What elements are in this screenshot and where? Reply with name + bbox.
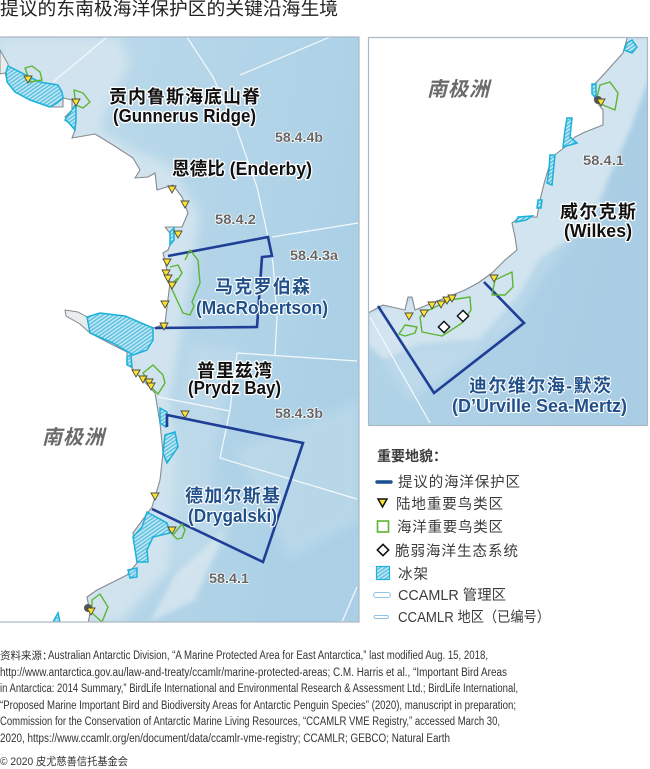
label: Gunnerus Ridge: 贡内鲁斯海底山脊 <box>109 86 260 107</box>
ice shelves <box>0 50 178 622</box>
marine important bird areas <box>399 82 618 336</box>
copyright: © 2020 皮尤慈善信托基金会 <box>0 754 128 768</box>
panel: right map <box>366 35 650 425</box>
CCAMLR region numbers <box>209 129 338 586</box>
label: Wilkes <box>560 201 636 241</box>
CCAMLR region numbers: 58.4.3a <box>290 247 338 263</box>
right map frame <box>368 38 648 426</box>
CCAMLR region numbers: 58.4.4b <box>275 129 323 145</box>
CCAMLR management and region boundaries <box>53 37 358 622</box>
legend item: ice shelf <box>376 566 428 583</box>
legend item: marine IBA: 海洋重要鸟类区 <box>397 519 503 536</box>
Antarctica landmass <box>0 73 188 624</box>
label: Gunnerus Ridge <box>109 86 260 126</box>
label: D'Urville Sea-Mertz: (D’Urville Sea-Mertz) <box>452 396 627 416</box>
CCAMLR boundary <box>370 317 430 423</box>
sources: http://www.antarctica.gov.au/law-and-treaty/ccamlr/marine-protected-areas; C.M. Harris et al., “Important Bird Areas <box>0 667 507 679</box>
sources <box>0 649 518 745</box>
label: Antarctica: 南极洲 <box>427 79 492 101</box>
panel: left map <box>0 37 359 624</box>
label: MacRobertson: (MacRobertson) <box>196 298 328 318</box>
label: Prydz Bay: 普里兹湾 <box>197 360 272 381</box>
legend title: 重要地貌： <box>377 448 447 464</box>
label: MacRobertson <box>196 277 328 318</box>
legend item: proposed MPA: 提议的海洋保护区 <box>398 474 520 491</box>
sources: Australian Antarctic Division, “A Marine Protected Area for East Antarctica,” last modified Aug. 15, 2018, <box>48 650 488 662</box>
label: Prydz Bay <box>188 360 281 398</box>
label: Prydz Bay: (Prydz Bay) <box>188 378 281 398</box>
label: Antarctica: 南极洲 <box>42 427 107 449</box>
CCAMLR region numbers: 58.4.1 <box>209 570 249 586</box>
CCAMLR region numbers: 58.4.2 <box>215 211 256 227</box>
Antarctica landmass <box>366 35 628 313</box>
ice shelves <box>516 40 637 222</box>
label: Drygalski <box>185 485 280 526</box>
label: D'Urville Sea-Mertz <box>452 375 627 416</box>
sources: 2020, https://www.ccamlr.org/en/document/data/ccamlr-vme-registry; CCAMLR; GEBCO; Natural Earth <box>0 733 450 745</box>
label: Wilkes: 威尔克斯 <box>560 201 636 222</box>
legend item: CCAMLR region: CCAMLR 地区（已编号） <box>398 609 550 626</box>
label: Gunnerus Ridge: (Gunnerus Ridge) <box>113 106 256 126</box>
terrestrial important bird areas <box>405 96 605 320</box>
CCAMLR region numbers: 58.4.3b <box>275 405 323 421</box>
label: Drygalski: (Drygalski) <box>188 506 277 526</box>
terrestrial important bird areas <box>24 76 189 615</box>
region number: 58.4.1 <box>583 152 624 168</box>
continental shelf <box>368 37 650 400</box>
legend item: ice shelf: 冰架 <box>398 566 428 583</box>
sources: 资料来源： <box>0 649 52 662</box>
legend item: VME: 脆弱海洋生态系统 <box>395 542 518 560</box>
ocean background <box>0 37 359 622</box>
proposed MPA: MacRobertson and Drygalski <box>152 237 303 562</box>
sources: in Antarctica: 2014 Summary,” BirdLife International and Environmental Research & Assessment Ltd.; BirdLife International, <box>0 683 518 695</box>
label: MacRobertson: 马克罗伯森 <box>215 277 310 297</box>
sources: “Proposed Marine Important Bird and Biodiversity Areas for Antarctic Penguin Species” (2020), manuscript in preparation; <box>0 700 516 712</box>
left map frame <box>0 37 359 622</box>
label: Drygalski: 德加尔斯基 <box>185 485 280 506</box>
vulnerable marine ecosystems <box>438 310 469 333</box>
label: D'Urville Sea-Mertz: 迪尔维尔海-默茨 <box>469 375 611 396</box>
legend item: terrestrial IBA: 陆地重要鸟类区 <box>396 496 503 513</box>
sources: Commission for the Conservation of Antarctic Marine Living Resources, “CCAMLR VME Registry,” accessed March 30, <box>0 716 500 728</box>
label: Wilkes: (Wilkes) <box>564 221 632 241</box>
marine important bird areas <box>25 66 200 622</box>
proposed MPA: D'Urville Sea-Mertz <box>378 282 524 393</box>
continental shelf <box>0 37 359 622</box>
ocean background <box>368 37 648 425</box>
label: Enderby: 恩德比 (Enderby) <box>172 158 312 179</box>
legend item: CCAMLR management area: CCAMLR 管理区 <box>398 587 506 604</box>
legend <box>374 448 550 626</box>
